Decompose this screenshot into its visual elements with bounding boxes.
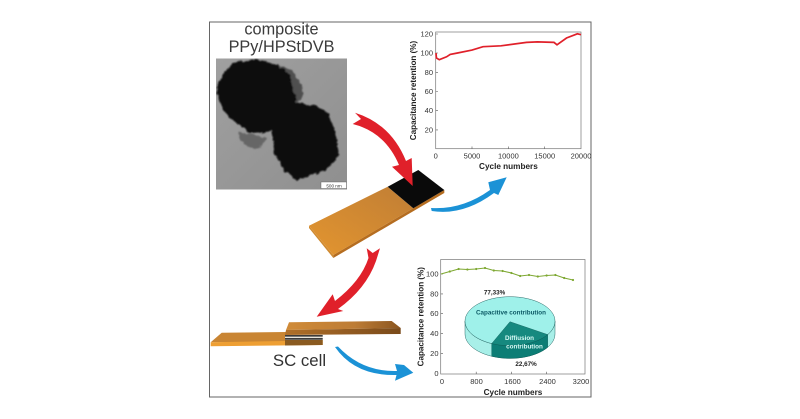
y axis tick labels: 80 bbox=[430, 289, 438, 298]
x axis tick labels: 5000 bbox=[464, 152, 480, 160]
y axis tick labels: 0 bbox=[434, 369, 438, 378]
value: 22,67%: 22,67% bbox=[515, 361, 537, 368]
chart: capacitance retention over 3200 cycles bbox=[416, 260, 589, 397]
y axis tick labels bbox=[426, 270, 438, 378]
value: 77,33%: 77,33% bbox=[484, 290, 506, 296]
pie label: capacitive: Capacitive contribution bbox=[476, 310, 546, 316]
3D pie chart bbox=[465, 290, 555, 368]
electrode strip bbox=[309, 170, 444, 258]
x axis tick labels: 10000 bbox=[498, 152, 519, 160]
y axis tick labels: 20 bbox=[425, 125, 433, 134]
x axis tick labels bbox=[434, 152, 591, 160]
x axis tick labels: 800 bbox=[470, 377, 483, 386]
separator layers bbox=[285, 335, 323, 340]
y axis tick labels: 120 bbox=[420, 30, 433, 38]
x axis tick labels: 15000 bbox=[534, 152, 555, 160]
pie label: diffusion: contribution bbox=[506, 344, 543, 350]
y axis tick labels: 40 bbox=[425, 106, 433, 115]
SC cell device bbox=[211, 321, 401, 346]
y axis tick labels: 40 bbox=[430, 329, 438, 338]
y axis tick labels: 60 bbox=[430, 309, 438, 318]
title: composite PPy/HPStDVB bbox=[229, 20, 334, 56]
x axis tick labels: 20000 bbox=[571, 152, 591, 160]
green data line bbox=[441, 267, 574, 281]
pie label: diffusion: Diffiusion bbox=[505, 335, 534, 342]
TEM micrograph bbox=[216, 58, 347, 190]
x axis tick labels: 0 bbox=[434, 152, 438, 160]
x axis tick labels: 1600 bbox=[504, 377, 521, 386]
y axis tick labels: 20 bbox=[430, 349, 438, 358]
y axis tick labels: 100 bbox=[426, 270, 438, 278]
arrow: TEM to electrode bbox=[353, 113, 413, 186]
x axis title: Cycle numbers bbox=[479, 162, 538, 171]
y axis tick labels bbox=[420, 30, 433, 134]
label: SC cell: SC cell bbox=[273, 351, 326, 370]
x axis tick labels bbox=[440, 377, 589, 386]
black active material bbox=[388, 170, 444, 208]
arrow: SC cell to cycling chart bbox=[335, 346, 413, 381]
title: composite PPy/HPStDVB: PPy/HPStDVB bbox=[229, 38, 334, 56]
scale bar: 500 nm bbox=[326, 183, 342, 188]
y axis title: Capacitance retention (%) bbox=[416, 267, 426, 366]
title: composite PPy/HPStDVB: composite bbox=[244, 20, 319, 38]
x axis title: Cycle numbers bbox=[484, 388, 543, 397]
chart: capacitance retention over 20000 cycles bbox=[409, 30, 591, 171]
pie label: diffusion bbox=[505, 335, 543, 350]
x axis tick labels: 2400 bbox=[539, 377, 556, 386]
y axis tick labels: 60 bbox=[425, 87, 433, 96]
red data line bbox=[436, 34, 581, 60]
x axis tick labels: 0 bbox=[440, 377, 444, 386]
y axis tick labels: 100 bbox=[420, 48, 433, 58]
x axis tick labels: 3200 bbox=[573, 377, 589, 386]
arrow: electrode to SC cell bbox=[317, 248, 380, 317]
figure frame bbox=[210, 22, 591, 397]
arrow: electrode to cycling chart bbox=[431, 177, 507, 212]
y axis tick labels: 80 bbox=[425, 68, 433, 77]
y axis title: Capacitance retention (%) bbox=[409, 41, 418, 140]
